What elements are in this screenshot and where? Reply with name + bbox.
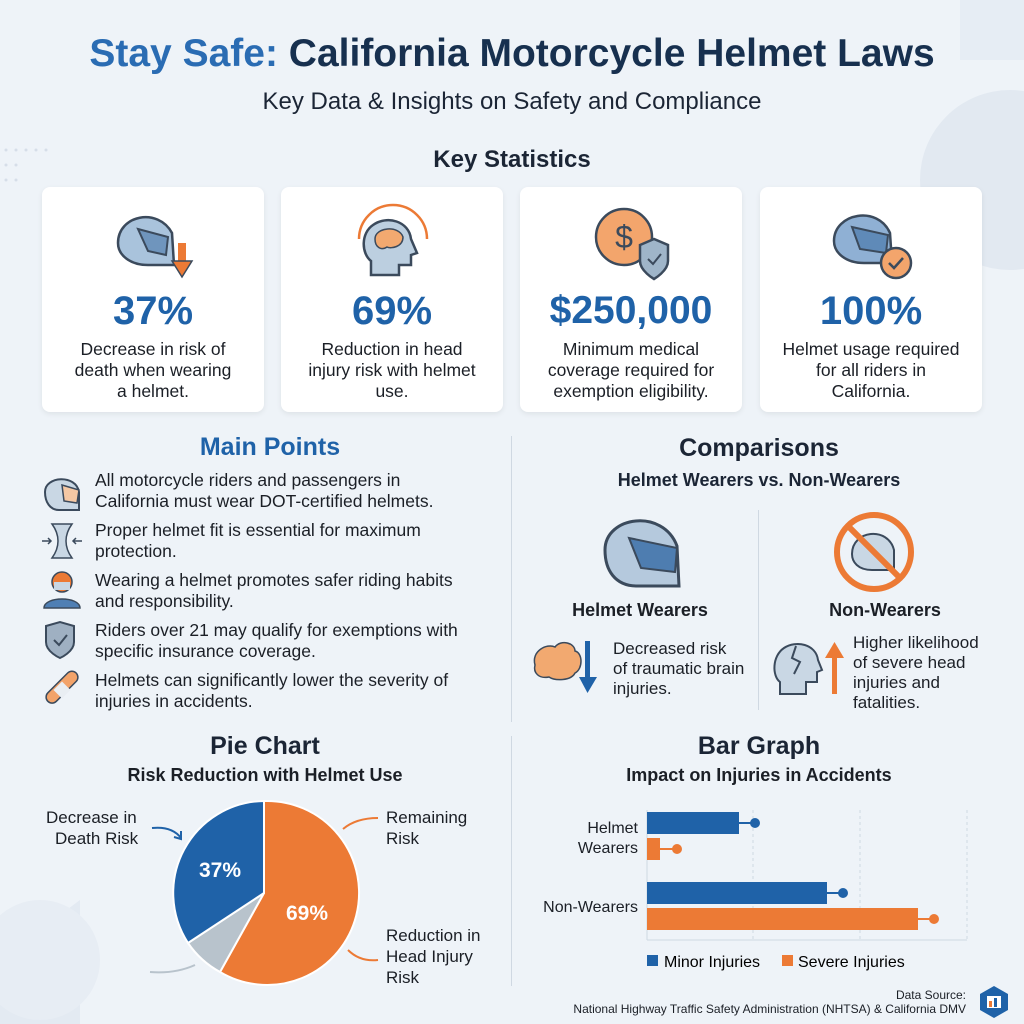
icon: prohibited helmet (834, 512, 914, 592)
bar chart: Minor Injuries (664, 954, 760, 971)
icon: dollar coin with shield: $ (615, 219, 633, 255)
pie chart: Decrease in (46, 808, 137, 827)
stat card: $250,000: Minimum medical (563, 339, 699, 359)
point 5 text: injuries in accidents. (95, 691, 253, 711)
subheading bar: Impact on Injuries in Accidents (626, 765, 892, 785)
text: Higher likelihood (853, 633, 979, 652)
stat card: 37%: 37% (113, 289, 193, 333)
point 5 text (95, 670, 448, 711)
subheading pie: Risk Reduction with Helmet Use (127, 765, 403, 785)
comparison: non-wearers (773, 512, 979, 712)
stat card: $250,000: coverage required for (548, 360, 714, 380)
bar chart: Severe Injuries (798, 954, 905, 971)
point 1 text: All motorcycle riders and passengers in (95, 470, 400, 490)
point 3 icon rider (43, 571, 81, 609)
icon: cracked head + up arrow (773, 642, 844, 695)
icon: helmet with down arrow (116, 216, 194, 278)
data source: Data Source: (896, 988, 966, 1002)
point 4 icon shield (45, 621, 75, 660)
stat card: $250,000 (520, 187, 742, 412)
point 2 text: Proper helmet fit is essential for maximum (95, 520, 421, 540)
pie chart: Remaining (386, 808, 467, 827)
comparison: helmet wearers (534, 519, 744, 698)
bar chart: Non-Wearers (543, 899, 638, 916)
text (853, 633, 979, 712)
stat card: 100%: for all riders in (816, 360, 926, 380)
text: of severe head (853, 653, 965, 672)
stat card: $250,000: exemption eligibility. (553, 381, 709, 401)
data source: National Highway Traffic Safety Administration (NHTSA) & California DMV (573, 1002, 966, 1016)
icon: helmet with check (832, 214, 912, 280)
pie chart: 37% (199, 859, 241, 882)
point 4 text: specific insurance coverage. (95, 641, 316, 661)
heading: bar graph: Bar Graph (698, 732, 820, 760)
pie chart (46, 800, 481, 987)
bar chart: Helmet (587, 820, 639, 837)
pie chart: 69% (286, 902, 328, 925)
heading: pie chart: Pie Chart (210, 732, 320, 760)
text (613, 639, 744, 698)
point 4 text (95, 620, 458, 661)
stat card: 69%: 69% (352, 289, 432, 333)
point 3 text: Wearing a helmet promotes safer riding habits (95, 570, 453, 590)
icon: helmet (604, 519, 681, 588)
stat card: 69% (281, 187, 503, 412)
stat card: 37%: Decrease in risk of (81, 339, 225, 359)
point 2 text (95, 520, 421, 561)
label: Non-Wearers (829, 600, 941, 620)
bar chart: Wearers (578, 840, 638, 857)
point 2 text: protection. (95, 541, 177, 561)
heading: key statistics: Key Statistics (433, 146, 591, 173)
icon: brain + down arrow (534, 641, 597, 693)
text: injuries. (613, 679, 672, 698)
heading: comparisons: Comparisons (679, 434, 839, 462)
stat card: 37% (42, 187, 264, 412)
icon: head with brain (358, 204, 428, 276)
text: injuries and (853, 673, 940, 692)
stat card: 100%: 100% (820, 289, 922, 333)
bar chart (543, 810, 968, 971)
stat card: 100%: Helmet usage required (782, 339, 960, 359)
main points list (42, 470, 458, 711)
point 3 text: and responsibility. (95, 591, 234, 611)
stat card: 37%: death when wearing (75, 360, 231, 380)
stat card: 69%: Reduction in head (321, 339, 463, 359)
stat card: 37%: a helmet. (117, 381, 189, 401)
stat card: 100%: California. (832, 381, 910, 401)
pie chart: Risk (386, 829, 420, 848)
icon: data logo (980, 986, 1008, 1018)
stat card: 100% (760, 187, 982, 412)
point 1 icon helmet (44, 478, 80, 511)
point 2 icon fit (42, 523, 82, 559)
stat card: 69%: injury risk with helmet (308, 360, 476, 380)
stat card: $250,000: $250,000 (550, 289, 712, 332)
text: fatalities. (853, 693, 920, 712)
pie chart: Death Risk (55, 829, 139, 848)
subtitle: Key Data & Insights on Safety and Compliance (263, 88, 761, 115)
stat card: 69%: use. (375, 381, 409, 401)
pie chart: Risk (386, 968, 420, 987)
point 3 text (95, 570, 453, 611)
point 5 text: Helmets can significantly lower the severity of (95, 670, 448, 690)
data source (573, 988, 966, 1016)
text: Decreased risk (613, 639, 726, 658)
pie chart: Reduction in (386, 926, 481, 945)
heading: main points: Main Points (200, 433, 340, 461)
label: Helmet Wearers (572, 600, 708, 620)
divider lines (511, 436, 512, 722)
pie chart: Head Injury (386, 947, 473, 966)
text: of traumatic brain (613, 659, 744, 678)
icon: dollar coin with shield (594, 208, 670, 280)
point 5 icon bandage (45, 670, 79, 704)
point 1 text (95, 470, 433, 511)
subheading comparisons: Helmet Wearers vs. Non-Wearers (618, 470, 900, 490)
point 4 text: Riders over 21 may qualify for exemptions with (95, 620, 458, 640)
title: Stay Safe: California Motorcycle Helmet Laws (89, 32, 935, 75)
point 1 text: California must wear DOT-certified helmets. (95, 491, 433, 511)
